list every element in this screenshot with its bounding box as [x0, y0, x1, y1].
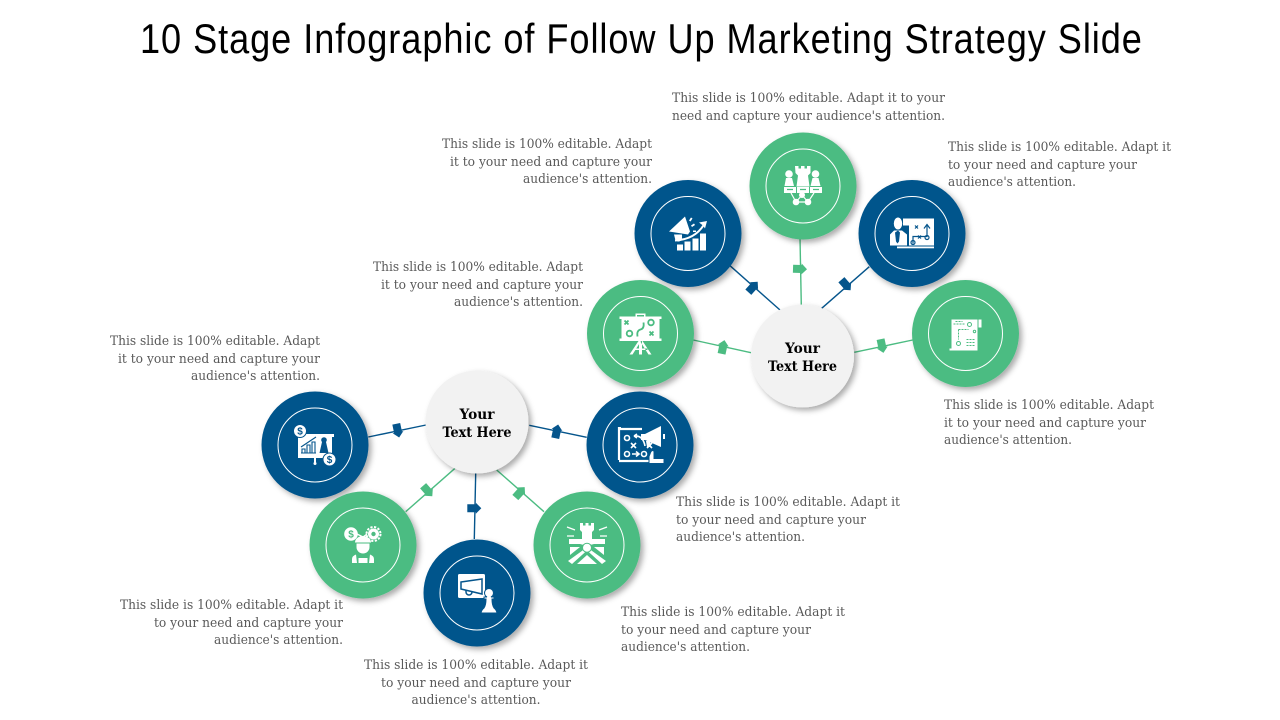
- text block: lower-right: audience's attention.: [621, 640, 750, 655]
- text block: left of upper cluster: audience's attention.: [454, 295, 583, 310]
- text block: lower-right: to your need and capture your: [621, 623, 812, 638]
- node: blue lower-left, investment presentation icon: $: [297, 426, 303, 438]
- text block: right of upper cluster: This slide is 100% editable. Adapt: [944, 398, 1155, 413]
- text block: right of upper cluster: [944, 398, 1155, 448]
- text block: upper-left: [442, 137, 653, 187]
- connectors: lower cluster: [368, 423, 587, 539]
- text block: top: This slide is 100% editable. Adapt it to your: [672, 91, 946, 106]
- text block: bottom: audience's attention.: [412, 693, 540, 708]
- text block: lower-right: [621, 605, 846, 655]
- node: blue upper-left, megaphone and growth chart icon: [634, 180, 742, 287]
- text block: lower-left: [120, 598, 344, 648]
- text block: left of lower cluster: it to your need and capture your: [118, 352, 321, 367]
- center node: lower cluster: [426, 370, 528, 474]
- text block: bottom: This slide is 100% editable. Adapt it: [364, 658, 589, 673]
- node: green lower-right, castle on peak icon: [534, 492, 640, 598]
- text block: bottom: to your need and capture your: [381, 676, 572, 691]
- text block: left of lower cluster: This slide is 100% editable. Adapt: [110, 334, 321, 349]
- text block: upper-right: to your need and capture your: [948, 158, 1138, 173]
- text block: left of upper cluster: This slide is 100% editable. Adapt: [373, 260, 584, 275]
- text block: upper-left: This slide is 100% editable. Adapt: [442, 137, 653, 152]
- center node: upper cluster: Text Here: [768, 359, 837, 375]
- text block: right of upper cluster: audience's attention.: [944, 433, 1072, 448]
- text block: upper-right: This slide is 100% editable. Adapt it: [948, 140, 1172, 155]
- center node: lower cluster: Your: [459, 407, 495, 423]
- text block: upper-right: [948, 140, 1172, 190]
- node: blue lower-left, investment presentation icon: $: [327, 455, 333, 466]
- node: green right, document map icon: [912, 280, 1019, 387]
- text block: right of lower cluster: This slide is 100% editable. Adapt it: [676, 495, 901, 510]
- connectors: upper cluster: [693, 238, 913, 355]
- center node: upper cluster: Your: [784, 341, 821, 357]
- text block: right of lower cluster: [676, 495, 901, 545]
- text block: lower-left: This slide is 100% editable. Adapt it: [120, 598, 344, 613]
- text block: right of upper cluster: it to your need and capture your: [944, 416, 1147, 431]
- text block: left of lower cluster: [110, 334, 321, 384]
- text block: left of lower cluster: audience's attention.: [191, 369, 320, 384]
- text block: upper-left: it to your need and capture your: [450, 155, 653, 170]
- text block: lower-left: to your need and capture your: [154, 616, 344, 631]
- title: 10 Stage Infographic of Follow Up Marketing Strategy Slide: [140, 17, 1142, 63]
- node: blue lower-left, investment presentation icon: [262, 392, 368, 498]
- node: green left, tactics easel icon: [587, 280, 694, 387]
- center node: lower cluster: Text Here: [442, 425, 512, 441]
- text block: left of upper cluster: it to your need and capture your: [381, 278, 584, 293]
- text block: lower-left: audience's attention.: [214, 633, 343, 648]
- text block: right of lower cluster: audience's attention.: [676, 530, 805, 545]
- text block: bottom: [364, 658, 589, 708]
- text block: upper-left: audience's attention.: [523, 172, 652, 187]
- node: blue lower-right, campaign map icon: [586, 392, 694, 498]
- text block: top: [672, 91, 946, 124]
- node: green top, chess team icon: [750, 132, 856, 240]
- node: blue bottom, megaphone and pawn icon: [424, 540, 530, 646]
- text block: left of upper cluster: [373, 260, 584, 310]
- text block: top: need and capture your audience's attention.: [672, 109, 945, 124]
- node: green lower-left, worker with dollar and gear icon: $: [348, 530, 354, 540]
- text block: upper-right: audience's attention.: [948, 175, 1076, 190]
- text block: right of lower cluster: to your need and capture your: [676, 513, 867, 528]
- node: blue upper-right, presenter with strategy board icon: [858, 180, 966, 287]
- center node: upper cluster: [751, 304, 854, 408]
- text block: lower-right: This slide is 100% editable. Adapt it: [621, 605, 846, 620]
- node: green lower-left, worker with dollar and gear icon: [310, 492, 416, 598]
